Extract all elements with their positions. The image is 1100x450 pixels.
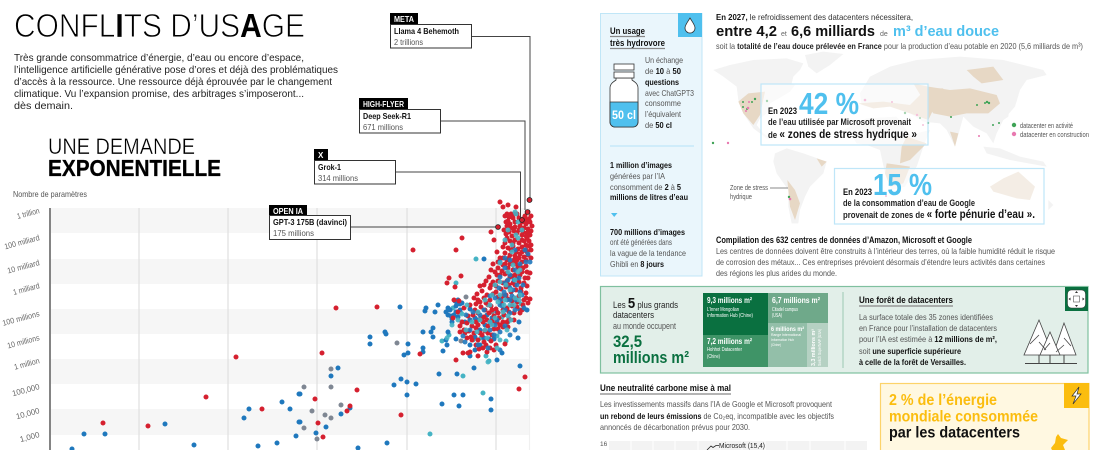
callout: Google 15 %: provenait de zones de « forte pénurie d’eau ».	[843, 209, 1035, 221]
scatter chart: number of parameters: 10 milliard	[6, 258, 41, 275]
text: datacenter forest	[859, 295, 997, 367]
scatter chart: number of parameters: 100 millions	[1, 309, 41, 328]
zone de stress label: hydrique	[730, 192, 752, 201]
text: datacenter forest: Une forêt de datacenters	[859, 295, 953, 306]
chart heading: EXPONENTIELLE	[48, 155, 221, 181]
icon: forest	[1024, 320, 1077, 364]
callout: OpenAI GPT-3: 175 millions	[273, 228, 314, 238]
icon: water drop	[678, 13, 702, 37]
scatter chart: number of parameters: 10,000	[15, 406, 41, 421]
map legend: datacenter en activité	[1020, 121, 1073, 130]
callout: High-Flyer Deep Seek-R1: 671 millions	[363, 122, 403, 132]
callout: Microsoft 42 %: En 2023	[768, 106, 797, 116]
headline: freshwater 2027: 6,6 milliards	[791, 23, 875, 40]
text: questions equivalent: questions	[645, 77, 679, 87]
text: Ghibli images: la vague de la tendance	[610, 248, 686, 258]
text: Ghibli images: Ghibli en 8 jours	[610, 259, 664, 269]
callout: Meta Llama 4 Behemoth: Llama 4 Behemoth	[394, 26, 459, 36]
text: five largest datacenters: 32,5	[613, 332, 642, 351]
panel: land use	[600, 286, 1088, 373]
intro text: d’accès à la ressource. Une ressource déjà éprouvée par le changement	[14, 76, 332, 88]
text: images water use: millions de litres d’eau	[610, 192, 688, 202]
scatter chart: number of parameters: 1 trillion	[16, 206, 41, 221]
text: five largest datacenters: au monde occupent	[613, 321, 676, 331]
icon: down triangle	[611, 213, 618, 217]
callout: Meta Llama 4 Behemoth: META	[394, 15, 414, 24]
heading: energy share: 2 % de l’énergie	[889, 392, 997, 409]
text: datacenter forest: La surface totale des 35 zones identifiées	[859, 312, 993, 322]
treemap: largest datacenters: Range International	[771, 332, 801, 337]
intro text: dès demain.	[14, 100, 73, 112]
panel: water use	[600, 13, 702, 276]
text: carbon neutrality: Les investissements massifs dans l’IA de Google et Microsoft provoquent	[600, 399, 833, 409]
callout: Meta Llama 4 Behemoth	[390, 13, 532, 202]
callout: X Grok-1: X	[318, 151, 324, 160]
intro text: Très grande consommatrice d’énergie, d’eau ou encore d’espace,	[14, 52, 304, 64]
text: Ghibli images: ont été générées dans	[610, 237, 672, 247]
scatter chart: number of parameters: Nombre de paramètres	[13, 189, 87, 199]
treemap: largest datacenters: Hohhot Datacenter	[707, 347, 742, 353]
icon: bottle 50 cl: 50 cl	[612, 108, 636, 122]
treemap: largest datacenters: 7,2 millions m²	[707, 337, 752, 346]
scatter chart: number of parameters: 1 million	[13, 356, 41, 372]
scatter chart: number of parameters: 10 millions	[6, 333, 41, 350]
treemap: largest datacenters: (USA)	[772, 313, 782, 319]
icon: bottle 50 cl	[610, 64, 638, 127]
icon: lightning	[1064, 383, 1089, 408]
chart: emissions	[600, 441, 867, 450]
text: images water use: 1 million d’images	[610, 160, 672, 170]
heading: energy share: mondiale consommée	[889, 408, 1038, 426]
text: carbon neutrality	[600, 383, 834, 432]
headline: freshwater 2027: m³ d’eau douce	[893, 23, 999, 40]
text: Ghibli images	[610, 227, 686, 269]
callout: Google 15 %: 15 %	[873, 167, 932, 202]
text: datacenter forest: soit une superficie supérieure	[859, 346, 961, 356]
chart heading	[48, 134, 221, 181]
heading: energy share	[889, 392, 1038, 442]
callout: Meta Llama 4 Behemoth: 2 trillions	[394, 37, 423, 47]
text: questions equivalent: avec ChatGPT3	[645, 88, 694, 98]
text: datacenter forest: pour l’IA est estimée à 12 millions de m²,	[859, 334, 997, 344]
text: compilation: Compilation des 632 centres de données d’Amazon, Microsoft et Google	[716, 235, 972, 245]
heading: water use: Un usage	[610, 26, 645, 37]
text: compilation: de corrosion des métaux... Ces entreprises prévoient désormais d’étendre leurs activités dans certaines	[716, 257, 1045, 267]
zone de stress label	[730, 183, 788, 201]
heading: water use: très hydrovore	[610, 38, 665, 49]
callout: High-Flyer Deep Seek-R1: Deep Seek-R1	[363, 111, 411, 121]
text: questions equivalent	[645, 55, 694, 130]
treemap: largest datacenters: (Chine)	[707, 354, 720, 360]
treemap: largest datacenters: Information Hub (Chine)	[707, 313, 753, 319]
treemap: largest datacenters	[703, 293, 828, 367]
text: carbon neutrality: Une neutralité carbone mise à mal	[600, 383, 731, 394]
callout: Google 15 %	[834, 167, 1044, 224]
callout: High-Flyer Deep Seek-R1	[359, 98, 530, 214]
icon: yellow map shape	[1051, 434, 1068, 450]
text: five largest datacenters: datacenters	[613, 310, 654, 320]
world map of water stress	[712, 52, 1089, 223]
headline: freshwater 2027: de	[880, 31, 888, 38]
treemap: largest datacenters: 6,7 millions m²	[772, 296, 820, 305]
callout: Microsoft 42 %: de « zones de stress hydrique »	[768, 129, 917, 141]
headline: freshwater 2027: En 2027, le refroidissement des datacenters nécessitera,	[716, 12, 913, 22]
scatter chart: number of parameters: 100,000	[11, 382, 41, 398]
treemap: largest datacenters: Switch SuperNAP (USA)	[817, 329, 822, 366]
text: questions equivalent: de 10 à 50	[645, 66, 681, 76]
chart: emissions: 16	[600, 441, 608, 448]
headline: freshwater 2027: et	[781, 31, 787, 38]
text: images water use: consomment de 2 à 5	[610, 182, 681, 192]
treemap: largest datacenters: L’Inner Mongolian	[707, 307, 739, 313]
text: carbon neutrality: un rebond de leurs émissions de Co₂eq, incompatible avec les objectifs	[600, 411, 834, 421]
intro text: l’intelligence artificielle générative pose d’ores et déjà des problématiques	[14, 64, 338, 76]
treemap: largest datacenters: 9,3 millions m²	[707, 296, 752, 305]
callout: Microsoft 42 %: de l’eau utilisée par Microsoft provenait	[768, 117, 911, 127]
intro text	[14, 52, 338, 112]
treemap: largest datacenters: 6 millions m²	[771, 326, 805, 333]
treemap: largest datacenters: Citadel campus	[772, 307, 798, 313]
text: questions equivalent: de 50 cl	[645, 120, 672, 130]
text: five largest datacenters: Les 5 plus grands	[613, 295, 678, 312]
text: Ghibli images: 700 millions d’images	[610, 227, 685, 237]
treemap: largest datacenters: (Chine)	[771, 342, 782, 347]
callout: Microsoft 42 %	[761, 84, 928, 145]
headline: freshwater 2027: entre 4,2	[716, 23, 777, 40]
callout: OpenAI GPT-3	[269, 205, 500, 240]
headline: freshwater 2027	[716, 12, 1083, 51]
map dots: active datacenters	[712, 98, 1000, 198]
scatter chart: number of parameters: 100 milliard	[3, 233, 41, 251]
text: carbon neutrality: annoncés de décarbonation prévus pour 2030.	[600, 422, 750, 432]
text: compilation	[716, 235, 1055, 278]
title: CONFLITS D’USAGE	[14, 8, 305, 45]
text: questions equivalent: consomme	[645, 98, 681, 108]
text: compilation: des régions les plus arides du monde.	[716, 268, 837, 278]
text: five largest datacenters: millions m²	[613, 348, 689, 367]
treemap: largest datacenters: 3,3 millions m²	[811, 329, 817, 366]
text: images water use: générées par l’IA	[610, 171, 665, 181]
callout: Microsoft 42 %: 42 %	[799, 86, 859, 121]
scatter chart: number of parameters: 1,000	[19, 430, 41, 444]
text: datacenter forest: à celle de la forêt de Versailles.	[859, 357, 966, 367]
callout: High-Flyer Deep Seek-R1: HIGH-FLYER	[363, 100, 404, 109]
callout: X Grok-1: 314 millions	[318, 173, 358, 183]
zone de stress label: Zone de stress	[730, 183, 768, 192]
callout: OpenAI GPT-3: OPEN IA	[273, 207, 303, 216]
callout: Google 15 %: de la consommation d’eau de Google	[843, 198, 975, 208]
text: images water use	[610, 160, 688, 202]
callout: OpenAI GPT-3: GPT-3 175B (davinci)	[273, 217, 347, 227]
text: questions equivalent: Un échange	[645, 55, 683, 65]
scatter chart: number of parameters	[1, 189, 532, 450]
panel: energy	[880, 383, 1089, 450]
map legend	[1012, 121, 1089, 139]
chart: emissions: Microsoft (15,4)	[719, 441, 765, 450]
callout: X Grok-1: Grok-1	[318, 162, 341, 172]
intro text: climatique. Vu l’expansion promise, des arbitrages s’imposeront...	[14, 88, 304, 100]
map dots: datacenters under construction	[727, 99, 980, 200]
treemap: largest datacenters: Information Hub	[771, 337, 795, 342]
text: five largest datacenters	[613, 295, 689, 367]
icon: expand square	[1065, 287, 1088, 311]
callout: X Grok-1	[314, 149, 524, 222]
heading: water use	[610, 26, 665, 49]
scatter chart: number of parameters: 1 milliard	[12, 281, 41, 297]
chart heading: UNE DEMANDE	[48, 134, 195, 159]
callout: Google 15 %: En 2023	[843, 187, 872, 197]
text: datacenter forest: en France pour l’installation de datacenters	[859, 323, 997, 333]
heading: energy share: par les datacenters	[889, 424, 1020, 442]
text: questions equivalent: l’équivalent	[645, 109, 682, 119]
